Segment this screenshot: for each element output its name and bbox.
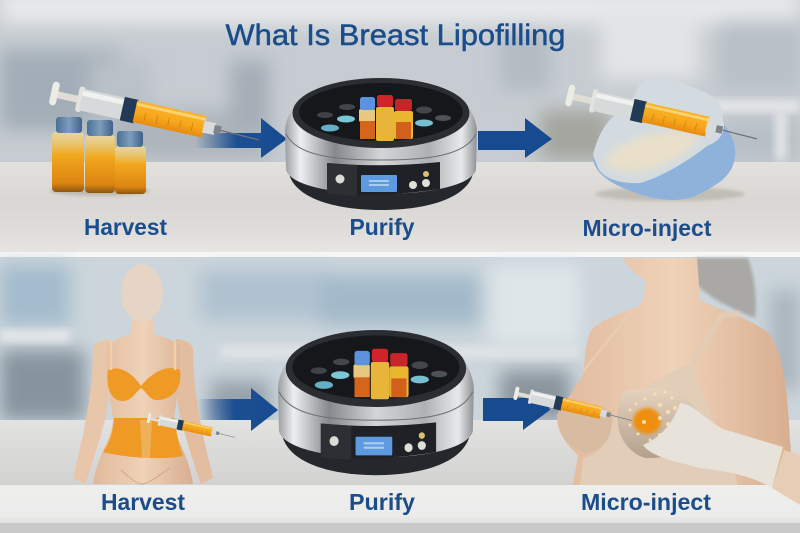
right cup bbox=[617, 388, 703, 458]
upper garment marked orange bbox=[107, 368, 180, 401]
centrifuge device, top bbox=[285, 78, 477, 210]
shoulder strap right bbox=[693, 314, 740, 362]
figure: mannequin with donor areas marked bbox=[73, 264, 213, 484]
vials: harvested fat samples bbox=[50, 117, 150, 196]
divider band bbox=[0, 252, 800, 257]
arrow: harvest to purify, bottom bbox=[198, 388, 278, 431]
arrow: purify to micro-inject, top bbox=[478, 118, 552, 158]
forearm bbox=[772, 450, 800, 505]
lower garment outline bbox=[121, 468, 170, 484]
lower label band bbox=[0, 485, 800, 523]
shoulder strap left bbox=[583, 310, 632, 372]
label: Harvest, top: Harvest bbox=[84, 214, 167, 240]
figure arms bbox=[73, 339, 110, 484]
breast implant model bbox=[593, 77, 745, 201]
arrow: harvest to purify, top bbox=[195, 118, 287, 158]
top counter bbox=[0, 162, 800, 252]
hair bbox=[695, 258, 756, 318]
shoulder straps bbox=[111, 341, 175, 370]
figure torso bbox=[93, 320, 193, 484]
syringe: harvest, bottom bbox=[146, 413, 236, 442]
centrifuge device, bottom bbox=[278, 330, 474, 475]
title: What Is Breast Lipofilling bbox=[226, 19, 566, 52]
top background laboratory scene bbox=[0, 0, 800, 162]
label: Purify, bottom: Purify bbox=[349, 489, 415, 515]
syringe: injection, bottom bbox=[513, 386, 634, 427]
syringe: harvest, top bbox=[48, 80, 262, 152]
counter front edge bbox=[0, 523, 800, 533]
garment bbox=[580, 362, 738, 485]
injected fat glow and droplets bbox=[628, 390, 688, 442]
torso bbox=[557, 258, 791, 485]
label: Purify, top: Purify bbox=[350, 214, 415, 240]
label: Micro-inject, top: Micro-inject bbox=[582, 215, 712, 241]
bottom background laboratory scene bbox=[0, 257, 800, 420]
label: Harvest, bottom: Harvest bbox=[101, 489, 185, 515]
arrow: purify to micro-inject, bottom bbox=[483, 398, 550, 430]
bottom counter bbox=[0, 420, 800, 485]
syringe: implant injection, top bbox=[564, 83, 760, 150]
label: Micro-inject, bottom: Micro-inject bbox=[581, 489, 711, 515]
left cup bbox=[558, 403, 612, 453]
figure: patient receiving injection bbox=[557, 258, 800, 505]
gloved hand bbox=[643, 403, 783, 488]
abdomen area marked orange bbox=[103, 418, 183, 458]
figure head bbox=[121, 264, 163, 322]
